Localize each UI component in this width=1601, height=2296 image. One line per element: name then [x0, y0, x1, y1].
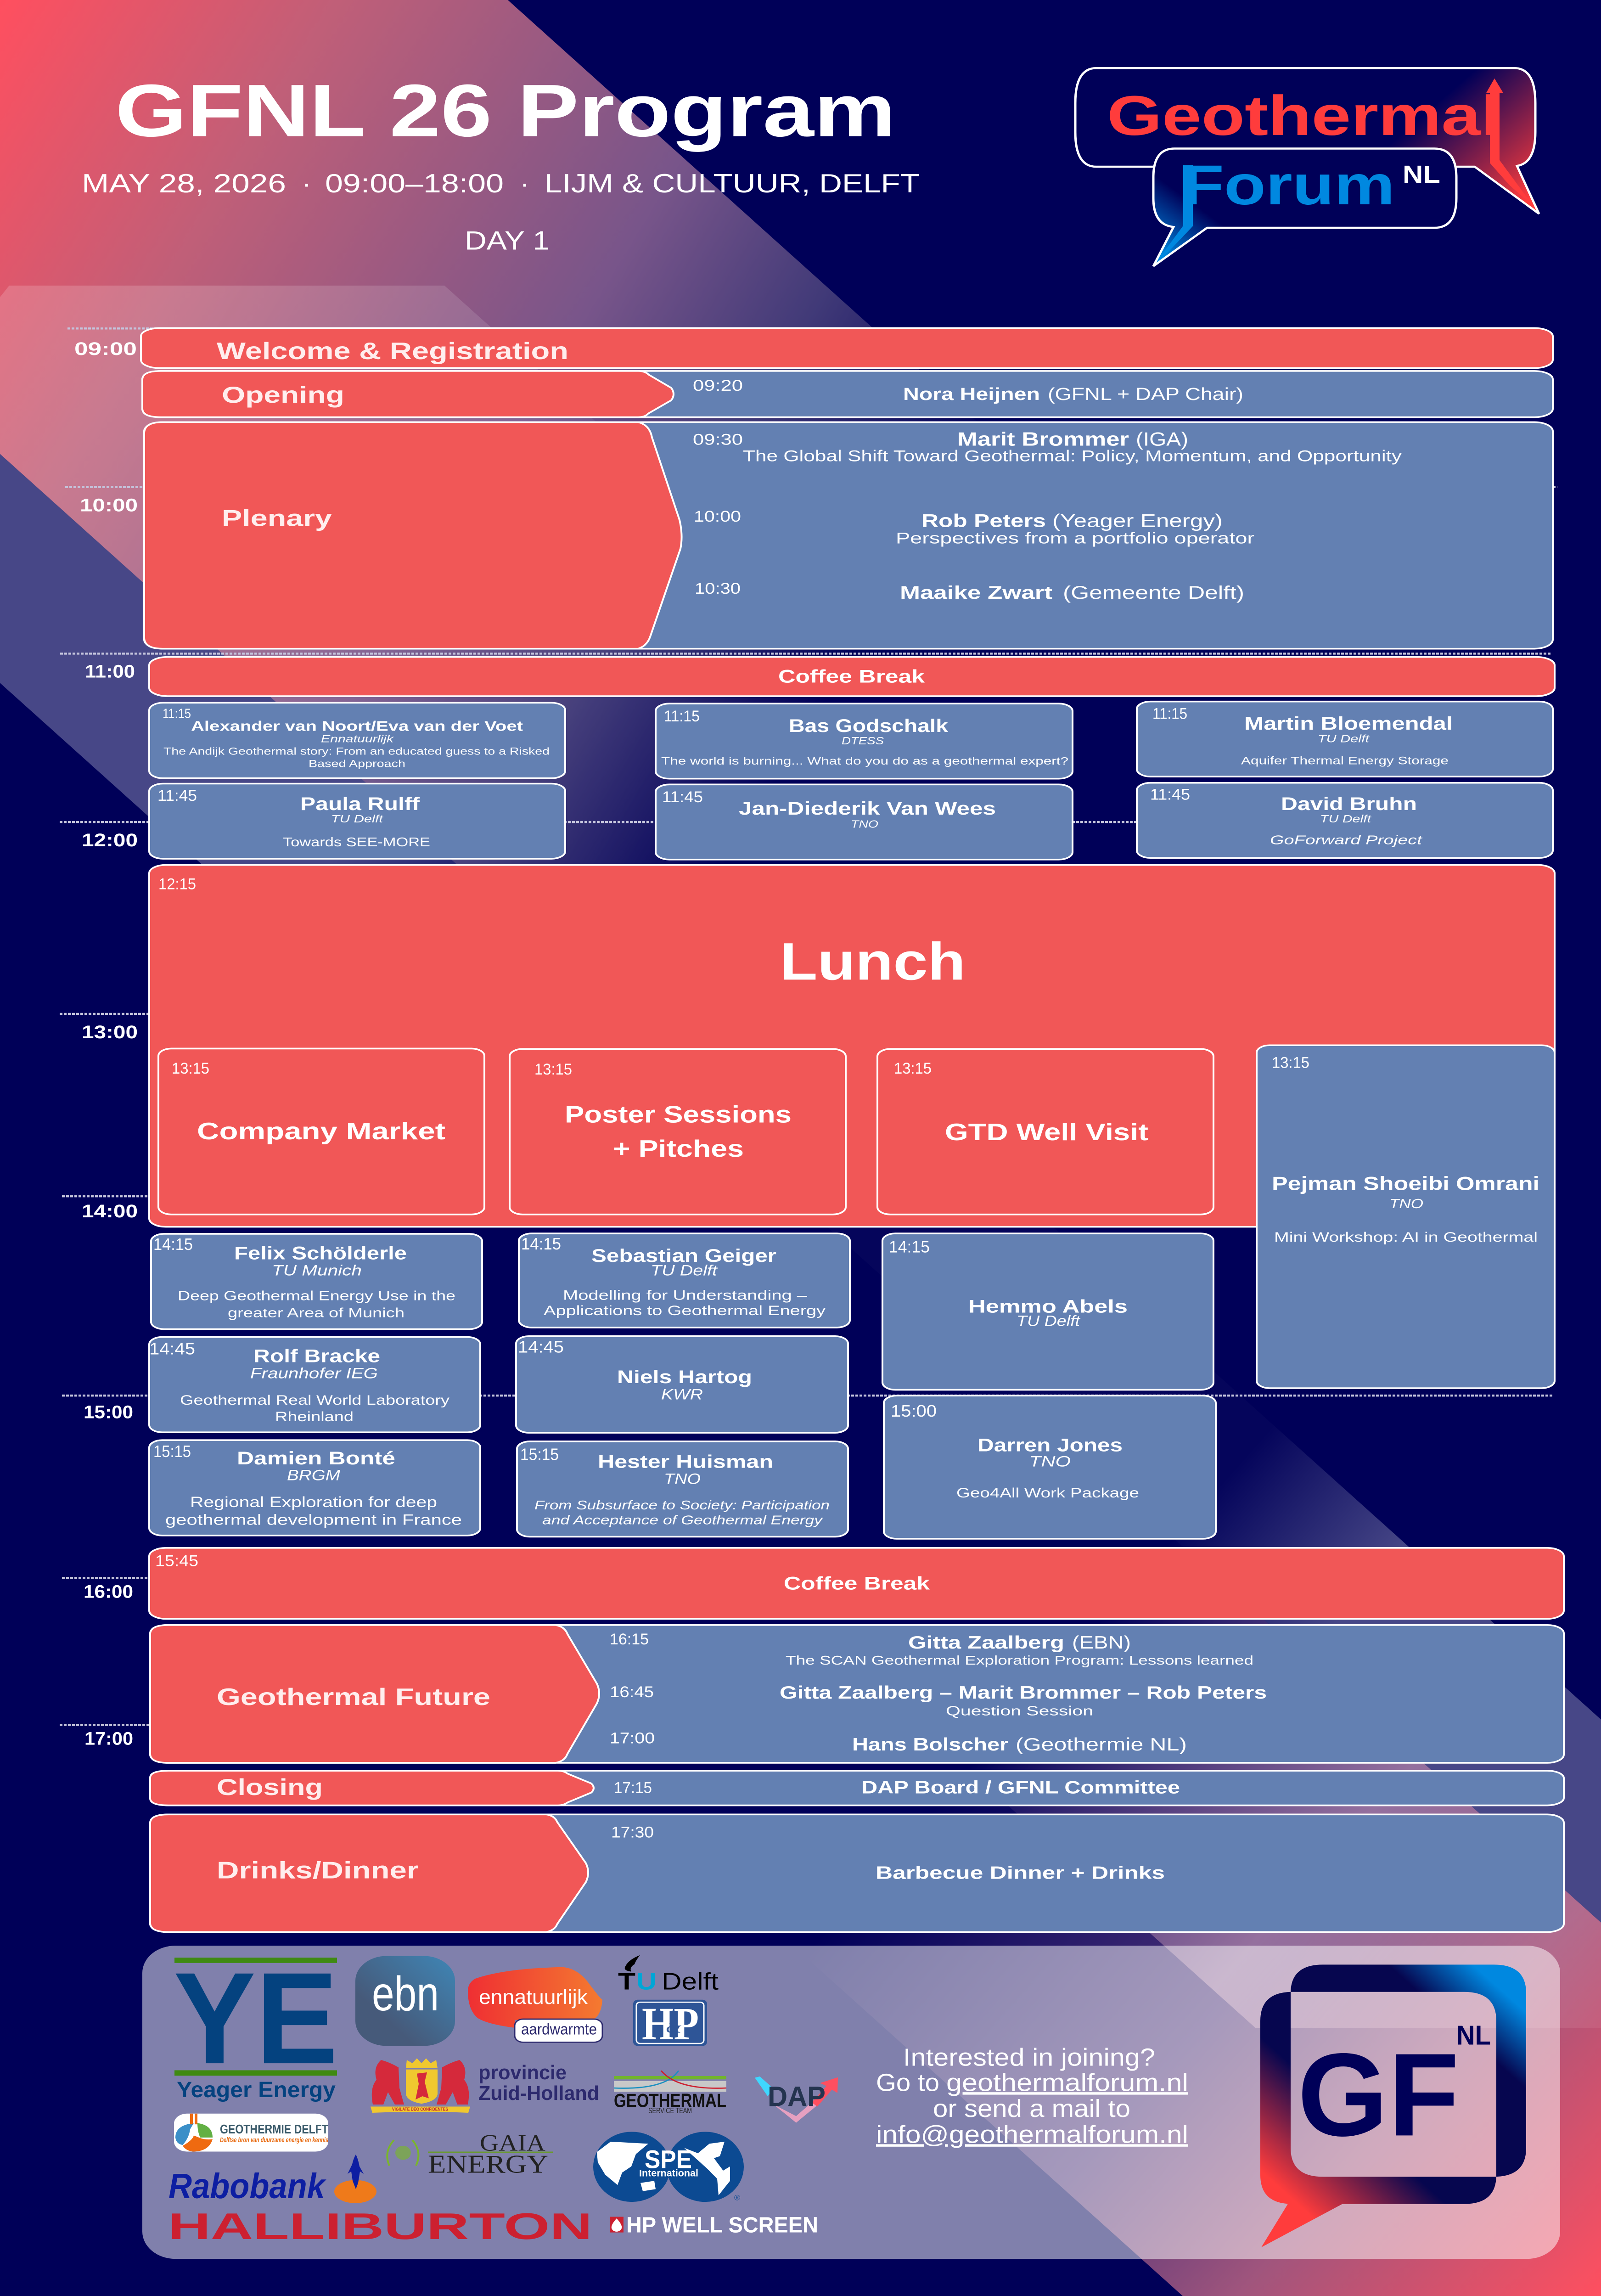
session box: Alexander van Noort / Eva van der Voet: 11:15	[163, 706, 191, 721]
logo: ennatuurlijk aardwarmte	[468, 1967, 602, 2042]
panel: lunch	[149, 865, 1555, 1227]
session box: Pejman Shoeibi Omrani	[1257, 1045, 1555, 1388]
time axis labels: 15:00	[84, 1402, 133, 1422]
panel: drinks and dinner: 17:30	[611, 1823, 654, 1841]
panel: opening: 09:20	[693, 377, 743, 394]
session box: Bas Godschalk: The world is burning... What do you do as a geothermal expert?	[661, 755, 1068, 767]
session box: Rolf Bracke: Rolf Bracke	[253, 1345, 380, 1366]
subtitle: date, time and venue: LIJM & CULTUUR, DELFT	[545, 169, 920, 198]
session box: Hester Huisman	[517, 1441, 848, 1537]
subtitle: date, time and venue: 09:00–18:00	[325, 169, 504, 198]
panel: geothermal future: Hans Bolscher	[852, 1734, 1008, 1755]
card: poster sessions and pitches: Poster Sessions	[565, 1101, 792, 1128]
session box: Hester Huisman: Hester Huisman	[598, 1452, 773, 1472]
session box: Sebastian Geiger: Modelling for Understanding –	[563, 1288, 808, 1303]
panel: plenary: (IGA)	[1136, 429, 1188, 450]
logo: Yeager Energy: Yeager Energy	[177, 2077, 336, 2102]
session box: Jan-Diederik Van Wees	[656, 784, 1073, 860]
panel: drinks and dinner: Drinks/Dinner	[217, 1857, 419, 1884]
card: company market: 13:15	[172, 1059, 209, 1077]
panel: geothermal future: Gitta Zaalberg – Marit Brommer – Rob Peters	[780, 1683, 1267, 1702]
session box: Alexander van Noort / Eva van der Voet	[149, 703, 565, 778]
session box: David Bruhn	[1137, 783, 1553, 858]
subtitle: date, time and venue: MAY 28, 2026	[82, 169, 286, 198]
time axis labels: 14:00	[82, 1201, 138, 1221]
logo: Rabobank: Rabobank	[169, 2167, 326, 2206]
hour grid lines	[60, 328, 1557, 1725]
panel: plenary	[144, 422, 1553, 649]
session box: Hemmo Abels: Hemmo Abels	[968, 1296, 1128, 1317]
session box: Alexander van Noort / Eva van der Voet: The Andijk Geothermal story: From an educated guess to a Risked	[163, 746, 550, 757]
logo: Halliburton: HALLIBURTON	[168, 2206, 592, 2247]
panel: opening: Nora Heijnen	[903, 385, 1040, 404]
session box: Bas Godschalk: 11:15	[664, 707, 700, 725]
session box: Darren Jones: Darren Jones	[977, 1435, 1123, 1455]
card: poster sessions and pitches: + Pitches	[613, 1135, 744, 1162]
logo: Geothermal Forum NL speech bubbles: Forum	[1182, 154, 1395, 216]
session box: Jan-Diederik Van Wees: Jan-Diederik Van Wees	[739, 798, 996, 818]
time axis labels: 10:00	[80, 495, 138, 515]
panel: drinks and dinner: Barbecue Dinner + Drinks	[876, 1863, 1165, 1883]
session box: David Bruhn: 11:45	[1150, 785, 1190, 803]
session box: Damien Bonte: 15:15	[153, 1443, 191, 1461]
session box: Damien Bonte: BRGM	[287, 1467, 341, 1484]
logo: DAP	[755, 2077, 838, 2123]
panel: lunch: Lunch	[780, 932, 966, 991]
session box: Bas Godschalk: Bas Godschalk	[789, 715, 949, 736]
logo: provincie Zuid-Holland wordmark: provincie	[478, 2061, 567, 2084]
session box: Sebastian Geiger	[519, 1233, 850, 1328]
session box: Niels Hartog	[516, 1336, 848, 1433]
card: poster sessions and pitches: 13:15	[534, 1060, 572, 1078]
session box: Damien Bonte: Regional Exploration for deep	[190, 1494, 437, 1510]
title: GFNL 26 Program	[115, 69, 896, 152]
panel: welcome and registration: Welcome & Registration	[217, 338, 568, 364]
session box: Sebastian Geiger: Sebastian Geiger	[591, 1245, 776, 1266]
session box: Felix Scholderle	[151, 1234, 482, 1329]
card: GTD well visit: GTD Well Visit	[945, 1119, 1148, 1145]
session box: Rolf Bracke: Fraunhofer IEG	[250, 1365, 378, 1382]
session box: Alexander van Noort / Eva van der Voet: Based Approach	[309, 758, 405, 770]
session box: Pejman Shoeibi Omrani: 13:15	[1272, 1053, 1309, 1071]
session box: Pejman Shoeibi Omrani: TNO	[1389, 1197, 1423, 1211]
session box: Martin Bloemendal: Aquifer Thermal Energy Storage	[1241, 754, 1449, 767]
session box: Paula Rulff: 11:45	[157, 787, 197, 805]
logo: TU Delft: U	[636, 1968, 657, 1995]
logo: Geothermal Forum NL speech bubbles: NL	[1403, 161, 1440, 188]
session box: David Bruhn: TU Delft	[1320, 813, 1371, 825]
panel: geothermal future: Question Session	[946, 1704, 1093, 1718]
logo: Gaia Energy: ENERGY	[428, 2150, 548, 2178]
panel: geothermal future: Geothermal Future	[217, 1683, 490, 1710]
session box: Martin Bloemendal	[1137, 702, 1553, 777]
logo: GF NL speech bubble: GF	[1298, 2029, 1459, 2161]
panel: closing	[150, 1771, 1564, 1806]
day label: DAY 1	[465, 226, 550, 255]
logo: TU Delft: T	[618, 1968, 635, 1995]
session box: Hester Huisman: 15:15	[520, 1446, 559, 1464]
session box: Paula Rulff: Paula Rulff	[300, 793, 420, 814]
subtitle: date, time and venue: ·	[302, 169, 311, 198]
session box: Darren Jones: 15:00	[891, 1402, 937, 1421]
card: company market	[158, 1048, 484, 1215]
session box: Hemmo Abels: 14:15	[889, 1238, 930, 1256]
panel: plenary: Perspectives from a portfolio operator	[896, 529, 1254, 547]
panel: geothermal future: (Geothermie NL)	[1016, 1734, 1187, 1755]
logo: H&amp;P: HP	[642, 1998, 699, 2050]
panel: footer with sponsors and contact	[142, 1945, 1560, 2259]
logo: Geothermal Service Team: GEOTHERMAL	[614, 2090, 726, 2111]
panel: closing: 17:15	[614, 1778, 652, 1796]
session box: Bas Godschalk: DTESS	[842, 735, 884, 747]
session box: Martin Bloemendal: 11:15	[1152, 704, 1187, 722]
logo: Geothermie Delft	[174, 2114, 328, 2151]
logo: SPE International: SPE	[645, 2145, 692, 2174]
logo: GF NL speech bubble: NL	[1456, 2020, 1491, 2051]
logo: H&amp;P: &	[666, 2017, 682, 2037]
logo: SPE International: International	[639, 2167, 698, 2178]
session box: Paula Rulff: TU Delft	[331, 813, 383, 825]
session box: Pejman Shoeibi Omrani: Pejman Shoeibi Omrani	[1272, 1173, 1539, 1194]
time axis labels: 12:00	[82, 830, 138, 850]
session box: Hester Huisman: From Subsurface to Society: Participation	[534, 1498, 830, 1513]
panel: plenary: (Yeager Energy)	[1052, 511, 1223, 531]
session box: David Bruhn: GoForward Project	[1270, 833, 1423, 847]
logo: Geothermie Delft: GEOTHERMIE DELFT	[220, 2122, 328, 2137]
panel: plenary: The Global Shift Toward Geothermal: Policy, Momentum, and Opportunity	[743, 447, 1402, 465]
panel: geothermal future: (EBN)	[1072, 1632, 1131, 1653]
session box: Darren Jones: Geo4All Work Package	[956, 1486, 1139, 1501]
logo: Gaia Energy: GAIA	[480, 2130, 546, 2156]
panel: geothermal future: The SCAN Geothermal Exploration Program: Lessons learned	[786, 1654, 1253, 1668]
session box: Felix Scholderle: Felix Schölderle	[234, 1243, 407, 1263]
session box: Felix Scholderle: 14:15	[153, 1236, 193, 1254]
session box: Alexander van Noort / Eva van der Voet: Alexander van Noort/Eva van der Voet	[191, 718, 523, 734]
time axis labels: 11:00	[85, 661, 135, 681]
session box: Niels Hartog: KWR	[661, 1386, 703, 1403]
session box: Damien Bonte: geothermal development in France	[165, 1512, 462, 1528]
session box: Hester Huisman: TNO	[664, 1471, 701, 1487]
logo: SPE International	[593, 2132, 744, 2202]
session box: Darren Jones	[884, 1396, 1216, 1539]
time axis labels	[74, 338, 138, 1749]
panel: geothermal future	[150, 1625, 1564, 1763]
panel: geothermal future: 17:00	[610, 1729, 655, 1747]
panel: plenary: Plenary	[222, 506, 332, 531]
session box: Bas Godschalk	[656, 703, 1073, 779]
panel: coffee break morning	[149, 657, 1555, 696]
session box: Rolf Bracke: Rheinland	[275, 1409, 354, 1424]
panel: opening	[142, 371, 1553, 417]
card: company market: Company Market	[197, 1118, 445, 1144]
logo: provincie Zuid-Holland crest	[371, 2058, 470, 2113]
logo: provincie Zuid-Holland wordmark: Zuid-Holland	[478, 2082, 599, 2105]
panel: opening: Opening	[222, 383, 344, 408]
session box: Felix Scholderle: Deep Geothermal Energy Use in the	[178, 1289, 455, 1303]
logo: SPE International: ®	[734, 2194, 741, 2202]
time axis labels: 13:00	[82, 1022, 138, 1042]
panel: geothermal future: 16:15	[610, 1630, 649, 1648]
panel: coffee break afternoon: Coffee Break	[784, 1573, 930, 1593]
panel: geothermal future: Gitta Zaalberg	[908, 1632, 1064, 1653]
logo: Geothermal Service Team: SERVICE TEAM	[648, 2106, 692, 2116]
logo: DAP: DAP	[768, 2081, 826, 2112]
logo: HP Well Screen: HP WELL SCREEN	[626, 2212, 818, 2237]
panel: coffee break morning: Coffee Break	[778, 666, 925, 687]
logo: Yeager Energy: YE	[174, 1945, 338, 2091]
session box: Damien Bonte	[149, 1440, 480, 1536]
logo: GF NL speech bubble	[1260, 1964, 1526, 2247]
panel: plenary: Rob Peters	[921, 511, 1046, 531]
session box: Felix Scholderle: greater Area of Munich	[228, 1306, 404, 1320]
panel: plenary: 10:00	[694, 507, 741, 525]
panel: welcome and registration	[141, 328, 1553, 368]
session box: Martin Bloemendal: TU Delft	[1318, 733, 1370, 745]
contact text: geothermalforum.nl	[946, 2069, 1188, 2097]
time axis labels: 16:00	[84, 1581, 133, 1602]
logo: Geothermal Service Team	[614, 2071, 726, 2116]
logo: provincie Zuid-Holland crest: VIGILATE DEO CONFIDENTES	[392, 2107, 448, 2112]
contact text: or send a mail to	[933, 2095, 1130, 2122]
subtitle: date, time and venue: ·	[520, 169, 529, 198]
panel: plenary: Maaike Zwart	[900, 582, 1052, 602]
subtitle: date, time and venue	[82, 169, 920, 198]
panel: opening: (GFNL + DAP Chair)	[1048, 385, 1243, 404]
session box: Felix Scholderle: TU Munich	[272, 1262, 362, 1279]
session box: Paula Rulff	[149, 784, 565, 859]
logo: TU Delft: Delft	[662, 1968, 719, 1995]
session box: David Bruhn: David Bruhn	[1281, 793, 1417, 814]
session box: Pejman Shoeibi Omrani: Mini Workshop: AI in Geothermal	[1274, 1230, 1538, 1245]
logo: Geothermie Delft: Delftse bron van duurzame energie en kennis	[220, 2137, 328, 2144]
session box: Jan-Diederik Van Wees: TNO	[851, 819, 878, 830]
panel: coffee break afternoon	[149, 1548, 1564, 1619]
card: GTD well visit	[877, 1049, 1213, 1215]
logo: ennatuurlijk aardwarmte: aardwarmte	[521, 2020, 597, 2038]
session box: Hemmo Abels	[882, 1233, 1213, 1390]
panel: closing: Closing	[217, 1775, 323, 1800]
logo: Geothermal Forum NL speech bubbles	[1075, 68, 1539, 266]
logo: Geothermal Forum NL speech bubbles: Geothermal	[1107, 84, 1500, 147]
logo: TU Delft	[618, 1955, 719, 1995]
session box: Alexander van Noort / Eva van der Voet: Ennatuurlijk	[321, 733, 394, 745]
session box: Rolf Bracke: 14:45	[149, 1340, 195, 1358]
session box: Rolf Bracke	[149, 1337, 480, 1432]
logo: ebn	[355, 1956, 455, 2046]
session box: Paula Rulff: Towards SEE-MORE	[283, 835, 430, 850]
contact text	[876, 2043, 1188, 2149]
card: poster sessions and pitches	[510, 1049, 846, 1215]
contact text: Interested in joining?	[903, 2043, 1155, 2071]
card: GTD well visit: 13:15	[894, 1059, 932, 1077]
session box: Darren Jones: TNO	[1029, 1453, 1071, 1470]
session box: Niels Hartog: Niels Hartog	[617, 1367, 752, 1387]
panel: closing: DAP Board / GFNL Committee	[861, 1777, 1180, 1797]
session box: Hester Huisman: and Acceptance of Geothermal Energy	[542, 1513, 824, 1527]
time axis labels: 09:00	[74, 338, 137, 359]
panel: drinks and dinner	[150, 1814, 1564, 1932]
panel: plenary: 10:30	[695, 580, 741, 597]
logo: provincie Zuid-Holland wordmark	[478, 2061, 599, 2105]
contact text: info@geothermalforum.nl	[876, 2121, 1188, 2149]
panel: plenary: (Gemeente Delft)	[1063, 582, 1244, 602]
panel: lunch: 12:15	[158, 875, 196, 893]
panel: plenary: 09:30	[693, 431, 743, 448]
logo: Gaia Energy	[387, 2130, 553, 2178]
time axis labels: 17:00	[84, 1728, 133, 1749]
session box: Sebastian Geiger: 14:15	[521, 1235, 561, 1254]
session box: Jan-Diederik Van Wees: 11:45	[662, 788, 703, 806]
session box: Niels Hartog: 14:45	[518, 1339, 564, 1356]
session box: Rolf Bracke: Geothermal Real World Laboratory	[180, 1392, 449, 1408]
session box: Damien Bonte: Damien Bonté	[237, 1448, 395, 1469]
session box: Hemmo Abels: TU Delft	[1017, 1313, 1081, 1329]
panel: plenary: Marit Brommer	[957, 429, 1129, 450]
panel: coffee break afternoon: 15:45	[155, 1552, 198, 1570]
contact text: Go to	[876, 2069, 939, 2097]
session box: Martin Bloemendal: Martin Bloemendal	[1244, 713, 1453, 733]
logo: ebn: ebn	[372, 1966, 439, 2021]
session box: Sebastian Geiger: Applications to Geothermal Energy	[544, 1303, 826, 1318]
panel: geothermal future: 16:45	[610, 1683, 654, 1701]
logo: ennatuurlijk aardwarmte: ennatuurlijk	[479, 1986, 588, 2009]
session box: Sebastian Geiger: TU Delft	[651, 1262, 718, 1279]
